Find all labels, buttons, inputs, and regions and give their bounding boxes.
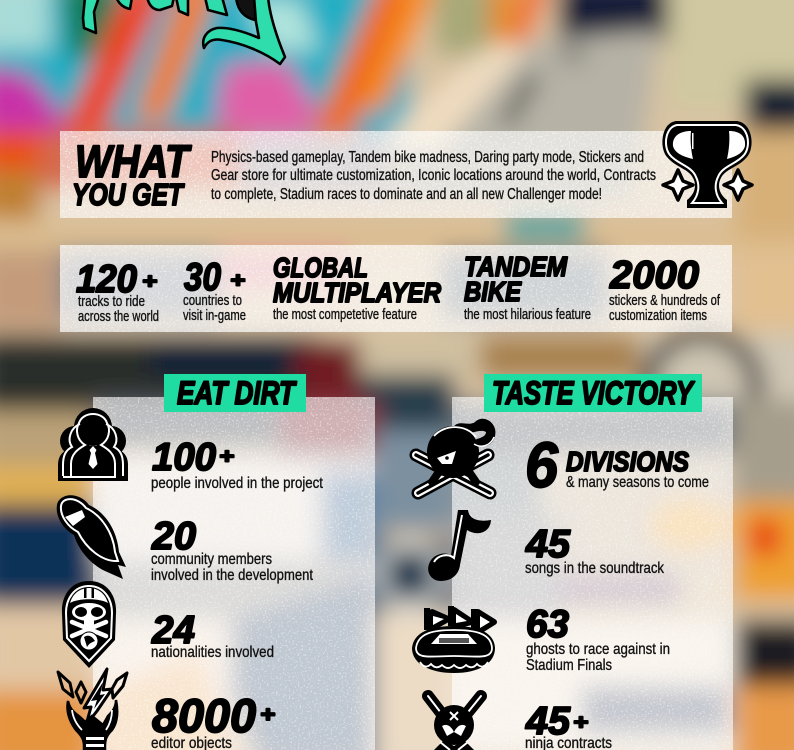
stat: 120+ tracks: 120 bbox=[76, 258, 137, 301]
stat: 100+ people: 100 bbox=[152, 436, 216, 479]
stat: 120+ tracks bbox=[76, 258, 159, 325]
stat: 6 divisions: & many seasons to come bbox=[566, 474, 709, 491]
stat: 20 community members: community members bbox=[151, 551, 272, 568]
stat: 2000 stickers: stickers & hundreds of bbox=[609, 293, 721, 309]
heading: what you get bbox=[72, 136, 192, 212]
stat: 2000 stickers: customization items bbox=[609, 308, 707, 324]
stat: 120+ tracks: + bbox=[142, 270, 157, 293]
heading: what you get: WHAT bbox=[75, 136, 192, 187]
stat: 6 divisions bbox=[525, 429, 709, 501]
icon part: right star bbox=[724, 170, 752, 200]
stat: 20 community members: involved in the development bbox=[151, 567, 313, 584]
stat: 63 ghosts: 63 bbox=[526, 603, 569, 646]
stat: 24 nationalities bbox=[151, 609, 274, 661]
text block: game description: to complete, Stadium races to dominate and an all new Challenger mode! bbox=[211, 186, 602, 203]
stat: 30+ countries: visit in-game bbox=[183, 308, 246, 324]
stat: 30+ countries: + bbox=[230, 269, 245, 292]
stat: global multiplayer bbox=[273, 252, 442, 323]
stat: tandem bike: TANDEM bbox=[464, 251, 568, 282]
stat: 120+ tracks: tracks to ride bbox=[78, 294, 145, 310]
stat: 45 songs bbox=[525, 523, 665, 577]
text block: game description: Gear store for ultimate customization, Iconic locations around the world, Contracts bbox=[211, 167, 656, 184]
heading: what you get: YOU GET bbox=[72, 177, 185, 212]
stat: 20 community members: 20 bbox=[151, 515, 196, 558]
stat: 2000 stickers: 2000 bbox=[609, 254, 699, 297]
stat: 8000+ editor objects: + bbox=[260, 702, 275, 727]
stat: 45 songs: 45 bbox=[525, 523, 571, 566]
text block: game description: Physics-based gameplay, Tandem bike madness, Daring party mode, Stickers and bbox=[211, 149, 644, 166]
stat: 63 ghosts: Stadium Finals bbox=[526, 657, 612, 674]
icon: rider bullet bbox=[57, 495, 126, 579]
stat: 63 ghosts: ghosts to race against in bbox=[526, 641, 670, 658]
stat: 8000+ editor objects: 8000 bbox=[152, 689, 256, 742]
stat: 45+ ninja contracts bbox=[525, 700, 612, 750]
stat: tandem bike: the most hilarious feature bbox=[464, 307, 591, 323]
heading tag: taste victory: TASTE VICTORY bbox=[492, 375, 695, 411]
icon: team of people bbox=[58, 408, 128, 481]
heading tag: eat dirt: EAT DIRT bbox=[177, 375, 297, 411]
stat: 24 nationalities: nationalities involved bbox=[151, 644, 274, 661]
icon: helmet skull bbox=[62, 581, 116, 668]
stat: global multiplayer: MULTIPLAYER bbox=[273, 277, 442, 308]
stat: 24 nationalities: 24 bbox=[151, 609, 195, 652]
stat: 30+ countries: 30 bbox=[184, 256, 221, 299]
text block: game description bbox=[211, 149, 656, 203]
icon: trophy bbox=[662, 121, 752, 208]
stat: global multiplayer: the most competetive feature bbox=[273, 307, 417, 323]
icon: stadium with flags bbox=[412, 606, 495, 673]
icon: music note bbox=[428, 510, 491, 581]
stat: tandem bike bbox=[464, 251, 591, 323]
stat: 100+ people: + bbox=[219, 445, 234, 468]
stat: 2000 stickers bbox=[609, 254, 721, 324]
panel: eat dirt background bbox=[93, 397, 375, 750]
stat: 6 divisions: DIVISIONS bbox=[566, 446, 689, 477]
stat: 45+ ninja contracts: 45 bbox=[525, 700, 571, 743]
stat: 30+ countries: countries to bbox=[183, 293, 242, 309]
stat: 30+ countries bbox=[183, 256, 246, 324]
panel: what you get background bbox=[60, 131, 732, 218]
panel: key features background bbox=[60, 245, 732, 332]
stat: 6 divisions: 6 bbox=[525, 429, 558, 501]
stat: 100+ people: people involved in the project bbox=[151, 475, 323, 492]
stat: 63 ghosts bbox=[526, 603, 670, 674]
icon: exploding light bulb bbox=[58, 669, 127, 750]
stat: 45+ ninja contracts: + bbox=[573, 711, 588, 734]
stat: 120+ tracks: across the world bbox=[78, 309, 159, 325]
panel: taste victory background bbox=[452, 397, 733, 750]
icon: knight with crossed swords bbox=[416, 419, 495, 493]
logo: cropped tails of the game logo bbox=[83, 0, 285, 64]
stat: tandem bike: BIKE bbox=[464, 276, 522, 307]
stat: 45 songs: songs in the soundtrack bbox=[525, 560, 665, 577]
stat: global multiplayer: GLOBAL bbox=[273, 252, 368, 283]
stat: 100+ people bbox=[151, 436, 323, 492]
icon part: left star bbox=[663, 170, 693, 200]
icon: ninja bbox=[428, 696, 481, 750]
stat: 20 community members bbox=[151, 515, 313, 584]
